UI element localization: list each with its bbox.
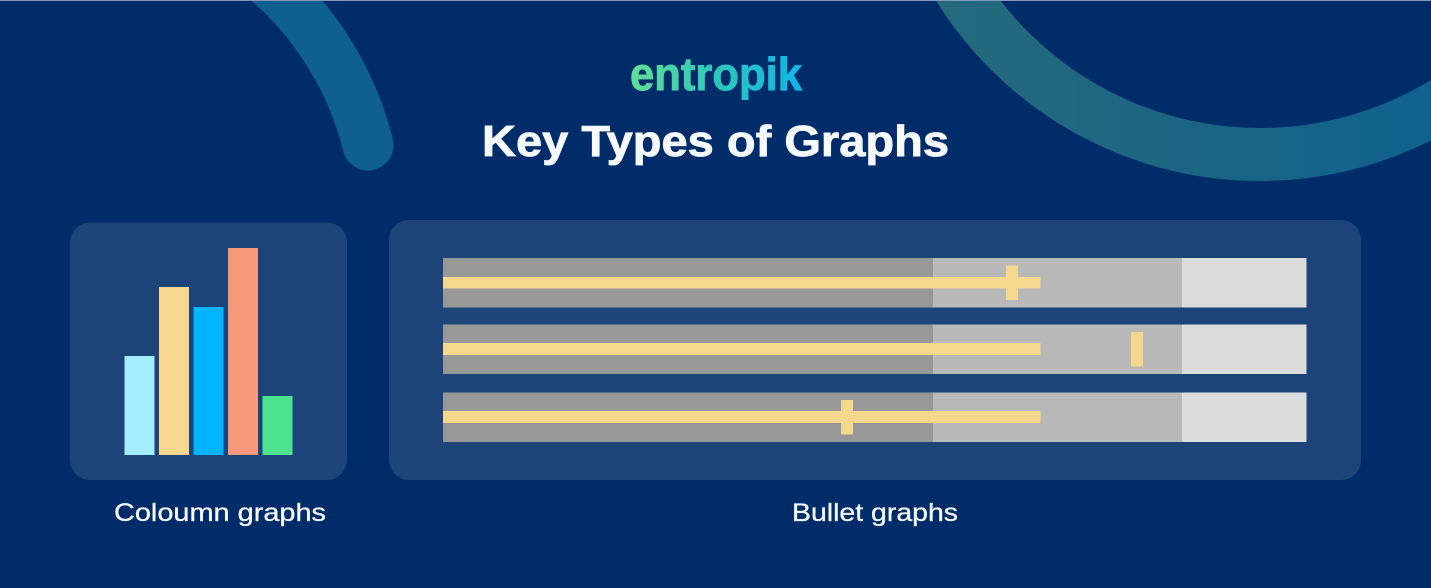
panel: bullet graphs [389, 220, 1361, 480]
bullet graph row 3 [443, 392, 1306, 442]
label: bullet graphs: Bullet graphs [792, 499, 958, 527]
decorative arc: left [258, 0, 368, 145]
column chart [124, 248, 292, 455]
logo: entropik: entropik [630, 48, 802, 100]
label: column graphs: Coloumn graphs [114, 499, 326, 527]
panel background [389, 220, 1361, 480]
decorative arc: right [906, 0, 1431, 154]
panel background [70, 222, 347, 480]
panel: column graph [70, 222, 347, 480]
bullet graph row 2 [443, 324, 1306, 374]
title: Key Types of Graphs [482, 117, 949, 166]
bullet graph row 1 [443, 258, 1306, 308]
